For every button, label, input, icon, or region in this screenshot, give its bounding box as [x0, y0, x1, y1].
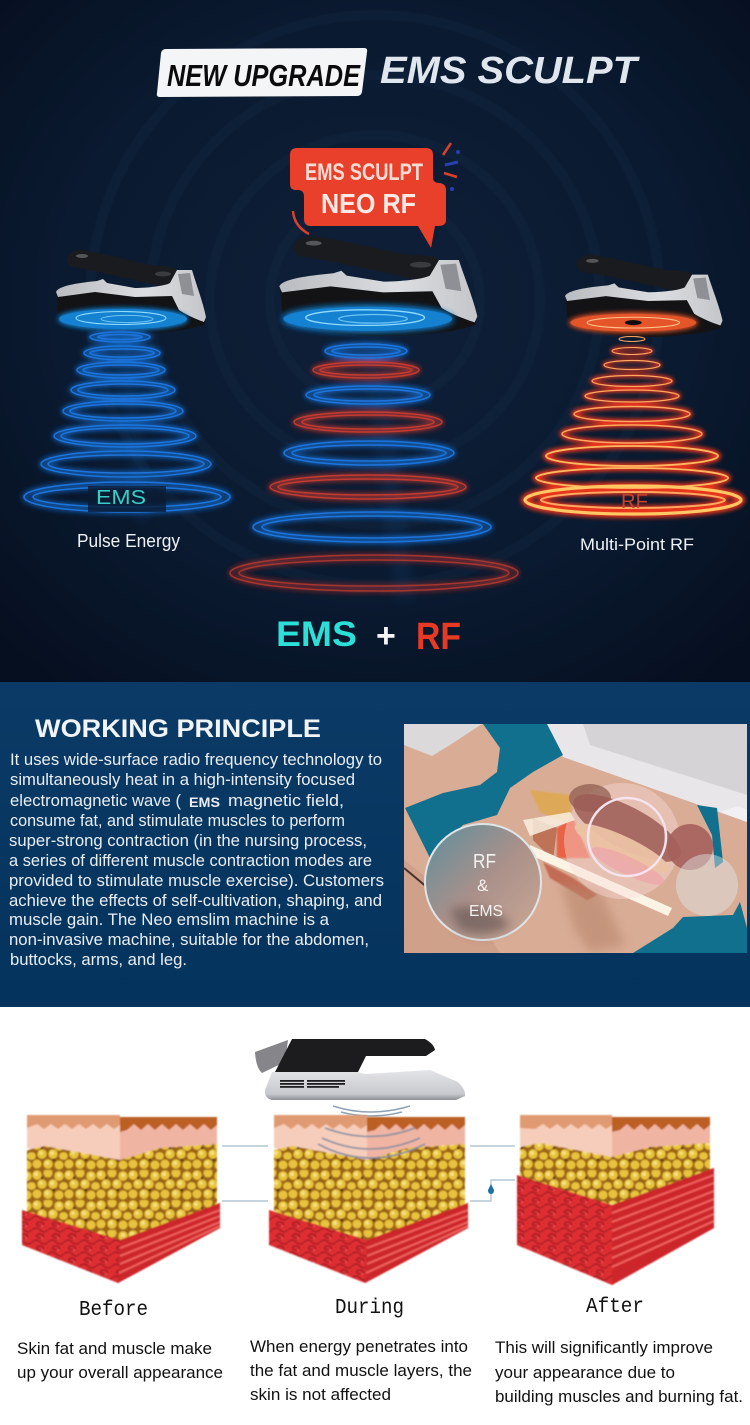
icon: applicator over skin: [255, 1039, 465, 1116]
badge: NEW UPGRADE: [157, 48, 367, 97]
callout: EMS SCULPT NEO RF speech bubble: [290, 143, 460, 248]
text block: working principle description: consume fat, and stimulate muscles to perform: [10, 812, 345, 830]
heading: working principle: WORKING PRINCIPLE: [35, 715, 321, 743]
icon: left EMS handpiece: [56, 250, 206, 334]
callout: EMS SCULPT NEO RF speech bubble: NEO RF: [321, 188, 416, 219]
photo: torso treatment illustration: [404, 724, 747, 953]
panel: before during after: [0, 1007, 750, 1425]
text block: before caption: Skin fat and muscle make: [17, 1339, 212, 1358]
badge: NEW UPGRADE: NEW UPGRADE: [167, 58, 361, 93]
text block: during caption: skin is not affected: [250, 1385, 391, 1404]
diagram: right RF rings: [525, 336, 741, 514]
icon: right RF handpiece: [565, 255, 723, 337]
callout: EMS SCULPT NEO RF speech bubble: EMS SCULPT: [305, 159, 423, 186]
callout: RF and EMS glass circle: RF: [473, 851, 496, 873]
callout: RF and EMS glass circle: EMS: [469, 903, 503, 920]
text block: working principle description: buttocks, arms, and leg.: [10, 951, 187, 969]
diagram: skin layers after: [517, 1115, 714, 1285]
text block: working principle description: a series of different muscle contraction modes are: [9, 852, 372, 870]
text block: working principle description: electromagnetic wave (: [10, 792, 181, 810]
diagram: centre EMS plus RF rings: [230, 344, 518, 591]
text block: before caption: [17, 1339, 223, 1382]
diagram: skin layers during: [269, 1115, 468, 1283]
text block: after caption: building muscles and burning fat.: [495, 1387, 743, 1406]
text block: working principle description: simultaneously heat in a high-intensity focused: [10, 771, 355, 789]
text block: working principle description: muscle gain. The Neo emslim machine is a: [9, 911, 330, 929]
callout: RF and EMS glass circle: [425, 824, 541, 940]
label: EMS: [88, 486, 166, 512]
label: Multi-Point RF: Multi-Point RF: [580, 535, 694, 554]
text block: working principle description: It uses wide-surface radio frequency technology to: [10, 751, 382, 769]
panel: working principle: [0, 682, 750, 1007]
label: Before: Before: [79, 1299, 148, 1322]
equation: EMS + RF: EMS: [276, 615, 357, 654]
text block: during caption: When energy penetrates into: [250, 1337, 468, 1356]
text block: after caption: This will significantly improve: [495, 1338, 713, 1357]
text block: before caption: up your overall appearance: [17, 1363, 223, 1382]
text block: after caption: [495, 1338, 743, 1406]
diagram: left EMS pulse rings: [24, 332, 230, 512]
label: Pulse Energy: Pulse Energy: [77, 531, 180, 551]
title: EMS SCULPT: EMS SCULPT: [380, 50, 640, 92]
text block: working principle description: magnetic field,: [228, 792, 344, 810]
text block: working principle description: super-strong contraction (in the nursing process,: [9, 832, 367, 850]
equation: EMS + RF: +: [376, 617, 396, 655]
text block: working principle description: [9, 751, 384, 969]
text block: working principle description: provided to stimulate muscle exercise). Customers: [9, 872, 384, 890]
text block: working principle description: EMS: [189, 794, 220, 810]
label: RF: RF: [621, 491, 648, 513]
diagram: connector lines: [222, 1146, 515, 1201]
text block: working principle description: achieve the effects of self-cultivation, shaping, and: [9, 892, 382, 910]
text block: during caption: [250, 1337, 472, 1404]
icon: centre handpiece: [279, 236, 477, 336]
callout: RF and EMS glass circle: &: [477, 876, 489, 895]
diagram: skin layers before: [22, 1115, 220, 1283]
panel: dark hero background: [0, 0, 750, 682]
text block: after caption: your appearance due to: [495, 1363, 675, 1382]
equation: EMS + RF: [276, 615, 461, 658]
equation: EMS + RF: RF: [416, 616, 461, 658]
text block: during caption: the fat and muscle layers, the: [250, 1361, 472, 1380]
text block: working principle description: non-invasive machine, suitable for the abdomen,: [9, 931, 369, 949]
label: EMS: EMS: [96, 487, 146, 509]
label: After: After: [586, 1296, 644, 1319]
label: During: During: [335, 1297, 404, 1320]
